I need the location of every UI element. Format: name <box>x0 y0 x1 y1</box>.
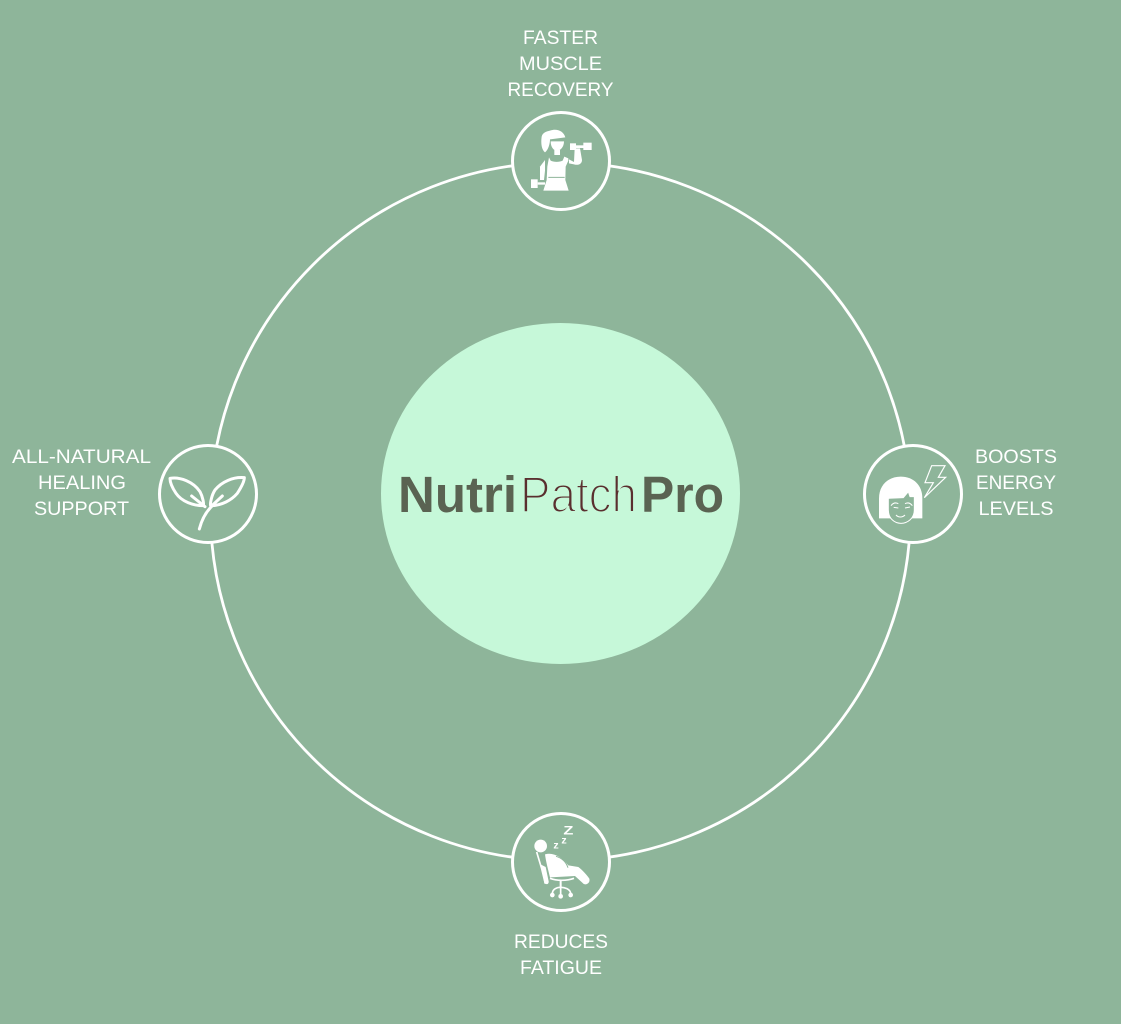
icon: person sleeping on office chair: z <box>561 836 567 847</box>
icon: sprout with two leaves <box>170 478 244 529</box>
icon: person sleeping on office chair: z <box>553 840 559 851</box>
logo: NutriPatchPro: Nutri <box>398 466 517 523</box>
node circle: right <box>864 446 962 542</box>
node: reduces fatigue <box>512 814 610 979</box>
node circle: bottom <box>512 814 610 910</box>
icon: person sleeping on office chair: Z <box>563 823 573 837</box>
label: reduces fatigue <box>514 932 608 979</box>
node: all-natural healing support <box>12 446 256 542</box>
label: faster muscle recovery: RECOVERY <box>508 80 614 101</box>
icon: person sleeping on office chair <box>534 823 590 899</box>
label: all-natural healing support <box>12 447 151 520</box>
logo: NutriPatchPro <box>398 466 724 523</box>
node circle: left <box>160 446 256 542</box>
label: reduces fatigue: FATIGUE <box>520 958 602 979</box>
logo: NutriPatchPro: Pro <box>641 466 724 523</box>
label: all-natural healing support: HEALING <box>38 473 126 494</box>
label: faster muscle recovery <box>508 28 614 101</box>
logo: NutriPatchPro: Patch <box>520 466 637 523</box>
label: all-natural healing support: SUPPORT <box>34 499 129 520</box>
orbit ring <box>210 162 910 860</box>
label: reduces fatigue: REDUCES <box>514 932 608 953</box>
label: faster muscle recovery: FASTER <box>523 28 598 49</box>
center ellipse with logo <box>381 323 740 664</box>
label: boosts energy levels <box>975 447 1057 520</box>
label: all-natural healing support: ALL-NATURAL <box>12 447 151 468</box>
label: boosts energy levels: ENERGY <box>976 473 1056 494</box>
node circle: top <box>512 112 610 210</box>
node: boosts energy levels <box>864 446 1057 542</box>
icon: woman's face with lightning bolt <box>879 466 946 523</box>
label: faster muscle recovery: MUSCLE <box>519 54 602 75</box>
node: faster muscle recovery <box>508 28 614 210</box>
label: boosts energy levels: LEVELS <box>978 499 1054 520</box>
label: boosts energy levels: BOOSTS <box>975 447 1057 468</box>
icon: woman lifting dumbbells <box>531 130 592 191</box>
